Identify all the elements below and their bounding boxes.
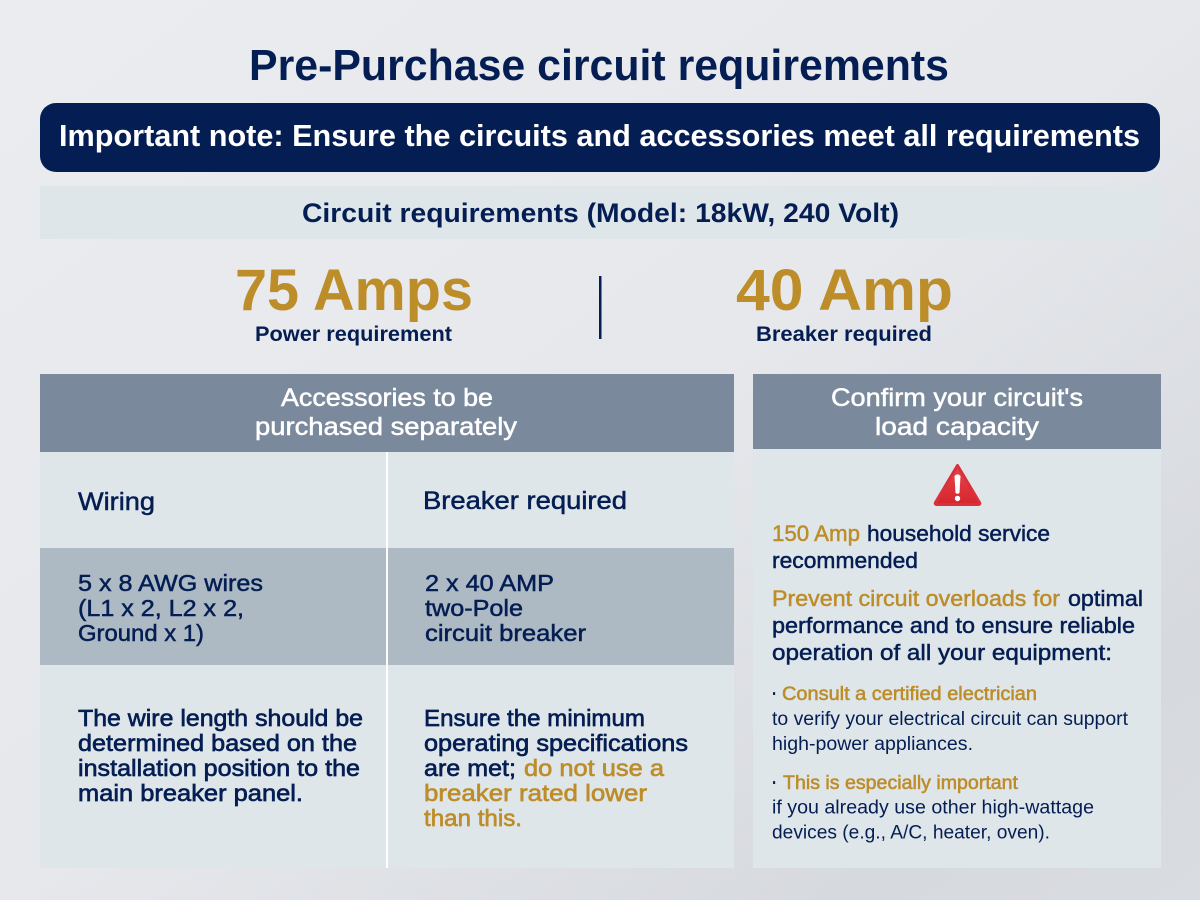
bullet: especially important: devices (e.g., A/C, heater, oven). xyxy=(772,822,1050,844)
breaker specification: circuit breaker xyxy=(425,620,586,646)
bullet: consult an electrician: high-power appliances. xyxy=(772,734,973,755)
load capacity panel background xyxy=(753,449,1161,868)
wire specification: Ground x 1) xyxy=(78,620,204,646)
wire length note: The wire length should be xyxy=(78,705,363,731)
accessories header xyxy=(40,374,734,452)
important note banner: Important note: Ensure the circuits and accessories meet all requirements xyxy=(59,118,1140,153)
stat: breaker required: Breaker required xyxy=(756,323,932,346)
accessories header: Accessories to be xyxy=(281,384,493,412)
breaker specification xyxy=(425,570,586,646)
title: Pre-Purchase circuit requirements xyxy=(249,41,949,90)
stat: power requirement: 75 Amps xyxy=(235,258,473,323)
prevent overloads text: performance and to ensure reliable xyxy=(772,613,1135,638)
prevent overloads text: optimal xyxy=(1068,586,1143,611)
bullet: consult an electrician: · xyxy=(772,684,777,705)
prevent overloads text: operation of all your equipment: xyxy=(772,640,1112,665)
recommended household service: household service xyxy=(867,521,1050,546)
panel: confirm your circuit's load capacity xyxy=(753,374,1161,868)
wire length note: main breaker panel. xyxy=(78,780,303,806)
breaker specification: 2 x 40 AMP xyxy=(425,570,554,596)
wire length note xyxy=(78,705,363,806)
bullet: consult an electrician: to verify your electrical circuit can support xyxy=(772,709,1129,730)
table row band xyxy=(40,548,734,665)
load capacity header: load capacity xyxy=(875,413,1040,441)
bullet: especially important: if you already use other high-wattage xyxy=(772,798,1094,818)
wire specification: 5 x 8 AWG wires xyxy=(78,570,263,596)
prevent overloads text: Prevent circuit overloads for xyxy=(772,586,1061,611)
circuit requirements band xyxy=(40,186,1160,239)
panel: accessories to be purchased separately xyxy=(40,374,734,868)
breaker warning note: than this. xyxy=(424,805,522,831)
divider between stats xyxy=(599,276,602,339)
wire specification: (L1 x 2, L2 x 2, xyxy=(78,595,244,621)
recommended household service xyxy=(772,521,1050,573)
breaker warning note: operating specifications xyxy=(424,730,688,756)
bullet: especially important: · xyxy=(772,773,777,794)
column heading: breaker required: Breaker required xyxy=(423,487,627,515)
important note banner xyxy=(40,103,1160,172)
breaker warning note: are met; xyxy=(424,755,516,781)
circuit requirements band: Circuit requirements (Model: 18kW, 240 Volt) xyxy=(302,198,899,228)
wire length note: installation position to the xyxy=(78,755,360,781)
bullet: especially important xyxy=(772,773,1094,844)
wire length note: determined based on the xyxy=(78,730,357,756)
load capacity header: Confirm your circuit's xyxy=(831,384,1083,412)
accessories panel background xyxy=(40,452,734,868)
bullet: consult an electrician xyxy=(772,684,1129,755)
bullet: consult an electrician: Consult a certified electrician xyxy=(782,684,1037,705)
breaker warning note: do not use a xyxy=(524,755,664,781)
recommended household service: 150 Amp xyxy=(772,521,860,546)
column divider xyxy=(386,452,388,868)
stat: power requirement: Power requirement xyxy=(255,323,452,346)
breaker warning note: Ensure the minimum xyxy=(424,705,645,731)
breaker warning note xyxy=(424,705,688,831)
wire specification xyxy=(78,570,263,646)
icon: red warning triangle xyxy=(935,466,980,504)
prevent overloads text xyxy=(772,586,1143,665)
stat: breaker required: 40 Amp xyxy=(736,258,953,323)
breaker specification: two-Pole xyxy=(425,595,523,621)
breaker warning note: breaker rated lower xyxy=(424,780,647,806)
recommended household service: recommended xyxy=(772,548,918,573)
column heading: wiring: Wiring xyxy=(78,488,155,516)
load capacity header xyxy=(753,374,1161,449)
accessories header: purchased separately xyxy=(255,413,518,441)
bullet: especially important: This is especially important xyxy=(783,773,1019,794)
